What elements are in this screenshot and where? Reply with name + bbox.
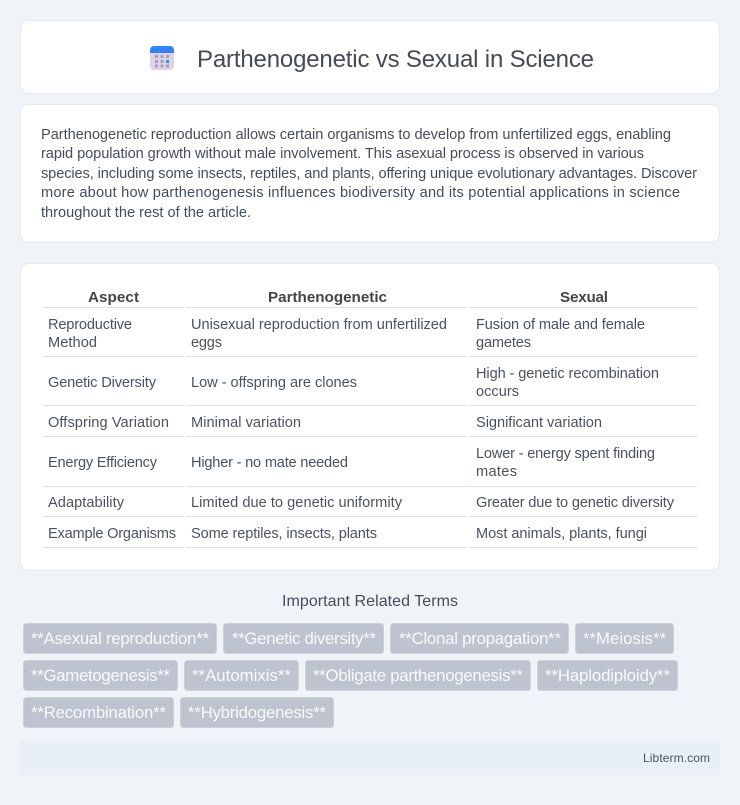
tag: gametogenesis: **Gametogenesis**: [31, 666, 170, 685]
intro paragraph: species, including some insects, reptiles, and plants, offering unique evolutionary advantages. Discover: [41, 166, 697, 182]
icon: calendar: [150, 46, 174, 70]
tag: genetic diversity: **Genetic diversity**: [232, 629, 376, 648]
row: adaptability: Greater due to genetic diversity: [476, 495, 675, 511]
title: Parthenogenetic vs Sexual in Science: [197, 46, 594, 73]
table header row: [88, 289, 608, 306]
tag: asexual reproduction: **Asexual reproduction**: [31, 629, 209, 648]
row: reproductive method: Unisexual reproduction from unfertilized: [191, 317, 447, 333]
tag: recombination: **Recombination**: [31, 703, 166, 722]
row: genetic diversity: High - genetic recombination: [476, 366, 659, 382]
row: reproductive method: Fusion of male and female: [476, 317, 645, 333]
tag: obligate parthenogenesis: **Obligate parthenogenesis**: [313, 666, 523, 685]
table header row: Sexual: [560, 289, 608, 306]
tag: hybridogenesis: [180, 698, 334, 728]
row: adaptability: Adaptability: [48, 495, 125, 511]
footer credit: Libterm.com: [643, 751, 710, 765]
tag: haplodiploidy: **Haplodiploidy**: [545, 666, 670, 685]
row: genetic diversity: occurs: [476, 384, 519, 400]
row: energy efficiency: [48, 446, 655, 480]
row: offspring variation: Minimal variation: [191, 415, 301, 431]
row: adaptability: [48, 495, 675, 511]
row: offspring variation: [48, 415, 602, 431]
row: reproductive method: gametes: [476, 335, 531, 351]
row: energy efficiency: mates: [476, 464, 517, 480]
row: reproductive method: [48, 317, 645, 351]
tag: haplodiploidy: [538, 660, 678, 690]
table rules: [43, 307, 697, 548]
panel: header: [20, 20, 720, 94]
row: energy efficiency: Energy Efficiency: [48, 455, 158, 471]
row: example organisms: Example Organisms: [48, 526, 176, 542]
row: example organisms: Most animals, plants, fungi: [476, 526, 647, 542]
tag: asexual reproduction: [24, 624, 216, 654]
row: reproductive method: Reproductive: [48, 317, 132, 333]
row: reproductive method: Method: [48, 335, 97, 351]
row: example organisms: Some reptiles, insects, plants: [191, 526, 377, 542]
intro paragraph: more about how parthenogenesis influences biodiversity and its potential applications in science: [41, 185, 680, 201]
tag: gametogenesis: [24, 660, 178, 690]
panel: comparison table: [20, 264, 720, 570]
row: offspring variation: Offspring Variation: [48, 415, 169, 431]
intro paragraph: throughout the rest of the article.: [41, 205, 251, 221]
panel: introduction: [20, 104, 720, 242]
row: reproductive method: eggs: [191, 335, 222, 351]
heading: important related terms: Important Related Terms: [282, 593, 458, 610]
tag: clonal propagation: [390, 624, 568, 654]
tag: genetic diversity: [224, 624, 384, 654]
tag: obligate parthenogenesis: [306, 660, 530, 690]
footer: [20, 741, 720, 775]
intro paragraph: rapid population growth without male involvement. This asexual process is observed in various: [41, 146, 644, 162]
tag: hybridogenesis: **Hybridogenesis**: [188, 703, 326, 722]
row: energy efficiency: Lower - energy spent finding: [476, 446, 655, 462]
tag: automixis: **Automixis**: [192, 666, 291, 685]
row: offspring variation: Significant variation: [476, 415, 602, 431]
tag: meiosis: **Meiosis**: [583, 629, 666, 648]
tag: automixis: [184, 660, 298, 690]
intro paragraph: Parthenogenetic reproduction allows certain organisms to develop from unfertilized eggs, enabling: [41, 127, 671, 143]
row: adaptability: Limited due to genetic uniformity: [191, 495, 403, 511]
table header row: Parthenogenetic: [268, 289, 387, 306]
row: genetic diversity: [48, 366, 659, 400]
related term tags: [24, 624, 678, 728]
tag: recombination: [24, 698, 174, 728]
row: example organisms: [48, 526, 647, 542]
tag: clonal propagation: **Clonal propagation**: [399, 629, 561, 648]
row: genetic diversity: Low - offspring are clones: [191, 375, 357, 391]
row: energy efficiency: Higher - no mate needed: [191, 455, 348, 471]
tag: meiosis: [576, 624, 674, 654]
row: genetic diversity: Genetic Diversity: [48, 375, 157, 391]
table header row: Aspect: [88, 289, 139, 306]
intro paragraph: [41, 127, 697, 221]
